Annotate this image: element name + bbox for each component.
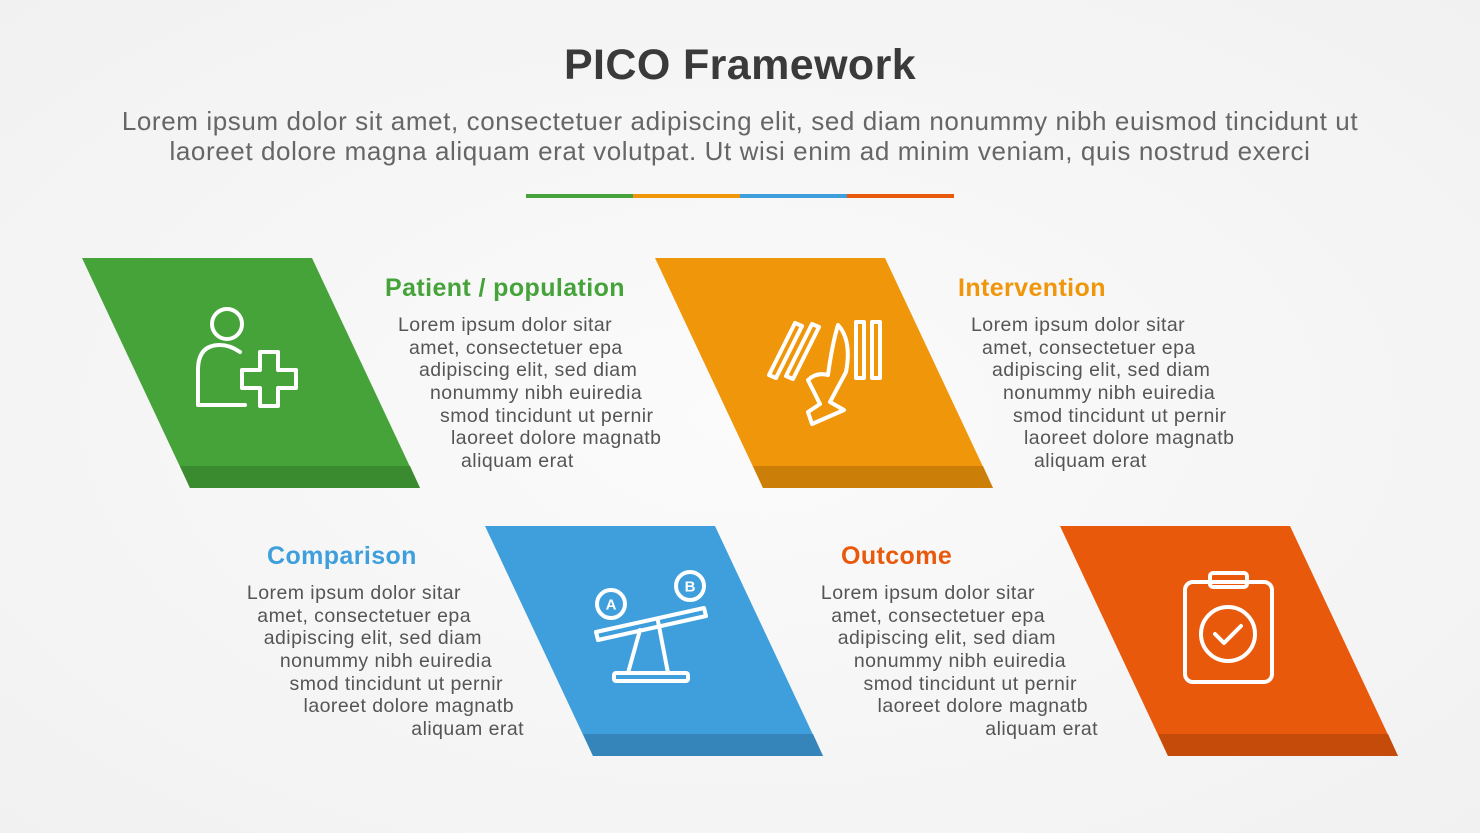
text: Lorem ipsum dolor sitar [821, 582, 1035, 604]
panel: intervention shape [655, 258, 993, 488]
heading: comparison: Comparison [267, 542, 417, 570]
text: laoreet dolore magnatb [451, 427, 661, 449]
text: aliquam erat [985, 718, 1098, 740]
text: nonummy nibh euiredia [854, 650, 1066, 672]
divider [526, 194, 954, 198]
shapes and icons: A [606, 596, 617, 614]
text: smod tincidunt ut pernir [440, 405, 653, 427]
icon: clipboard check [1185, 573, 1272, 682]
text: aliquam erat [1034, 450, 1147, 472]
text: comparison [247, 542, 524, 740]
shapes and icons: B [685, 578, 696, 596]
icon: person plus [198, 309, 296, 406]
body: outcome [821, 582, 1098, 740]
text: Lorem ipsum dolor sitar [971, 314, 1185, 336]
text: patient [385, 274, 661, 472]
text: Lorem ipsum dolor sitar [398, 314, 612, 336]
body: patient [398, 314, 661, 472]
text: Lorem ipsum dolor sitar [247, 582, 461, 604]
icon: hand with bars [769, 322, 880, 424]
subtitle [122, 106, 1358, 166]
text: adipiscing elit, sed diam [419, 359, 637, 381]
text: nonummy nibh euiredia [430, 382, 642, 404]
heading: outcome: Outcome [841, 542, 952, 570]
subtitle: Lorem ipsum dolor sit amet, consectetuer adipiscing elit, sed diam nonummy nibh euismod tincidunt ut [122, 106, 1358, 136]
text: laoreet dolore magnatb [878, 695, 1088, 717]
body: comparison [247, 582, 524, 740]
text: amet, consectetuer epa [409, 337, 623, 359]
text: intervention [958, 274, 1234, 472]
text: smod tincidunt ut pernir [1013, 405, 1226, 427]
text: smod tincidunt ut pernir [290, 673, 503, 695]
text: nonummy nibh euiredia [1003, 382, 1215, 404]
text: laoreet dolore magnatb [1024, 427, 1234, 449]
text: aliquam erat [411, 718, 524, 740]
text: laoreet dolore magnatb [304, 695, 514, 717]
subtitle: laoreet dolore magna aliquam erat volutpat. Ut wisi enim ad minim veniam, quis nostrud exerci [169, 136, 1311, 166]
panel: comparison shape [485, 526, 823, 756]
text: amet, consectetuer epa [982, 337, 1196, 359]
title: PICO Framework [564, 41, 916, 89]
body: intervention [971, 314, 1234, 472]
text: adipiscing elit, sed diam [992, 359, 1210, 381]
heading: intervention: Intervention [958, 274, 1106, 302]
text: outcome [821, 542, 1098, 740]
panel: outcome shape [1060, 526, 1398, 756]
text: adipiscing elit, sed diam [838, 627, 1056, 649]
icon: seesaw [596, 572, 706, 681]
panel: patient shape [82, 258, 420, 488]
heading: patient: Patient / population [385, 274, 625, 302]
text: amet, consectetuer epa [257, 605, 471, 627]
text: amet, consectetuer epa [831, 605, 1045, 627]
text: nonummy nibh euiredia [280, 650, 492, 672]
text: aliquam erat [461, 450, 574, 472]
text: smod tincidunt ut pernir [864, 673, 1077, 695]
text: adipiscing elit, sed diam [264, 627, 482, 649]
